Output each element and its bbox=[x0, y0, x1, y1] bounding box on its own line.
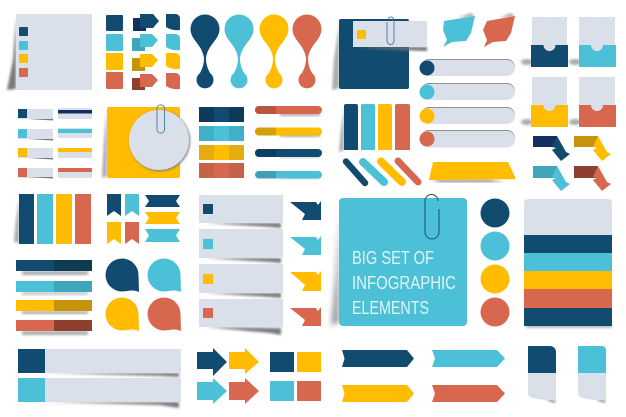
gray label cards bbox=[199, 195, 283, 335]
speech bubbles bbox=[443, 13, 515, 47]
colored circles bbox=[480, 198, 510, 326]
title text: INFOGRAPHIC bbox=[352, 273, 456, 293]
tall bars bbox=[14, 194, 91, 244]
yellow trapezoid banner bbox=[429, 162, 516, 182]
small squares bbox=[270, 352, 321, 401]
title text: BIG SET OF bbox=[352, 248, 434, 268]
slanted bars bbox=[346, 161, 418, 183]
folded bands bbox=[16, 260, 92, 335]
small labelled bars bbox=[18, 108, 92, 178]
tile set: squares, tag arrows, rounded corners bbox=[106, 14, 180, 90]
notched arrow tags bbox=[290, 201, 321, 326]
notched tabs bbox=[521, 17, 616, 127]
panel: navy note with clipped paper bbox=[332, 17, 427, 90]
vertical tabs bbox=[339, 104, 410, 152]
rounded two-tone bars bbox=[255, 106, 322, 179]
block arrows bbox=[197, 348, 259, 404]
panel: yellow note with round paper bbox=[102, 105, 190, 178]
panel: gray note with swatches bbox=[7, 14, 92, 90]
title text: ELEMENTS bbox=[352, 298, 429, 318]
wide bottom bars bbox=[18, 349, 181, 408]
three-fold bands bbox=[199, 107, 244, 178]
main title card bbox=[331, 195, 467, 326]
round speech tags bbox=[106, 258, 181, 331]
bookmarks bbox=[107, 194, 139, 244]
ribbons bbox=[145, 195, 180, 242]
stacked color panel bbox=[524, 199, 612, 328]
folded corner arrows bbox=[533, 136, 611, 191]
chevron banners bbox=[342, 350, 505, 402]
tall folded cards bbox=[528, 346, 606, 403]
toggle pills bbox=[420, 59, 515, 148]
teardrop pins bbox=[190, 14, 322, 88]
